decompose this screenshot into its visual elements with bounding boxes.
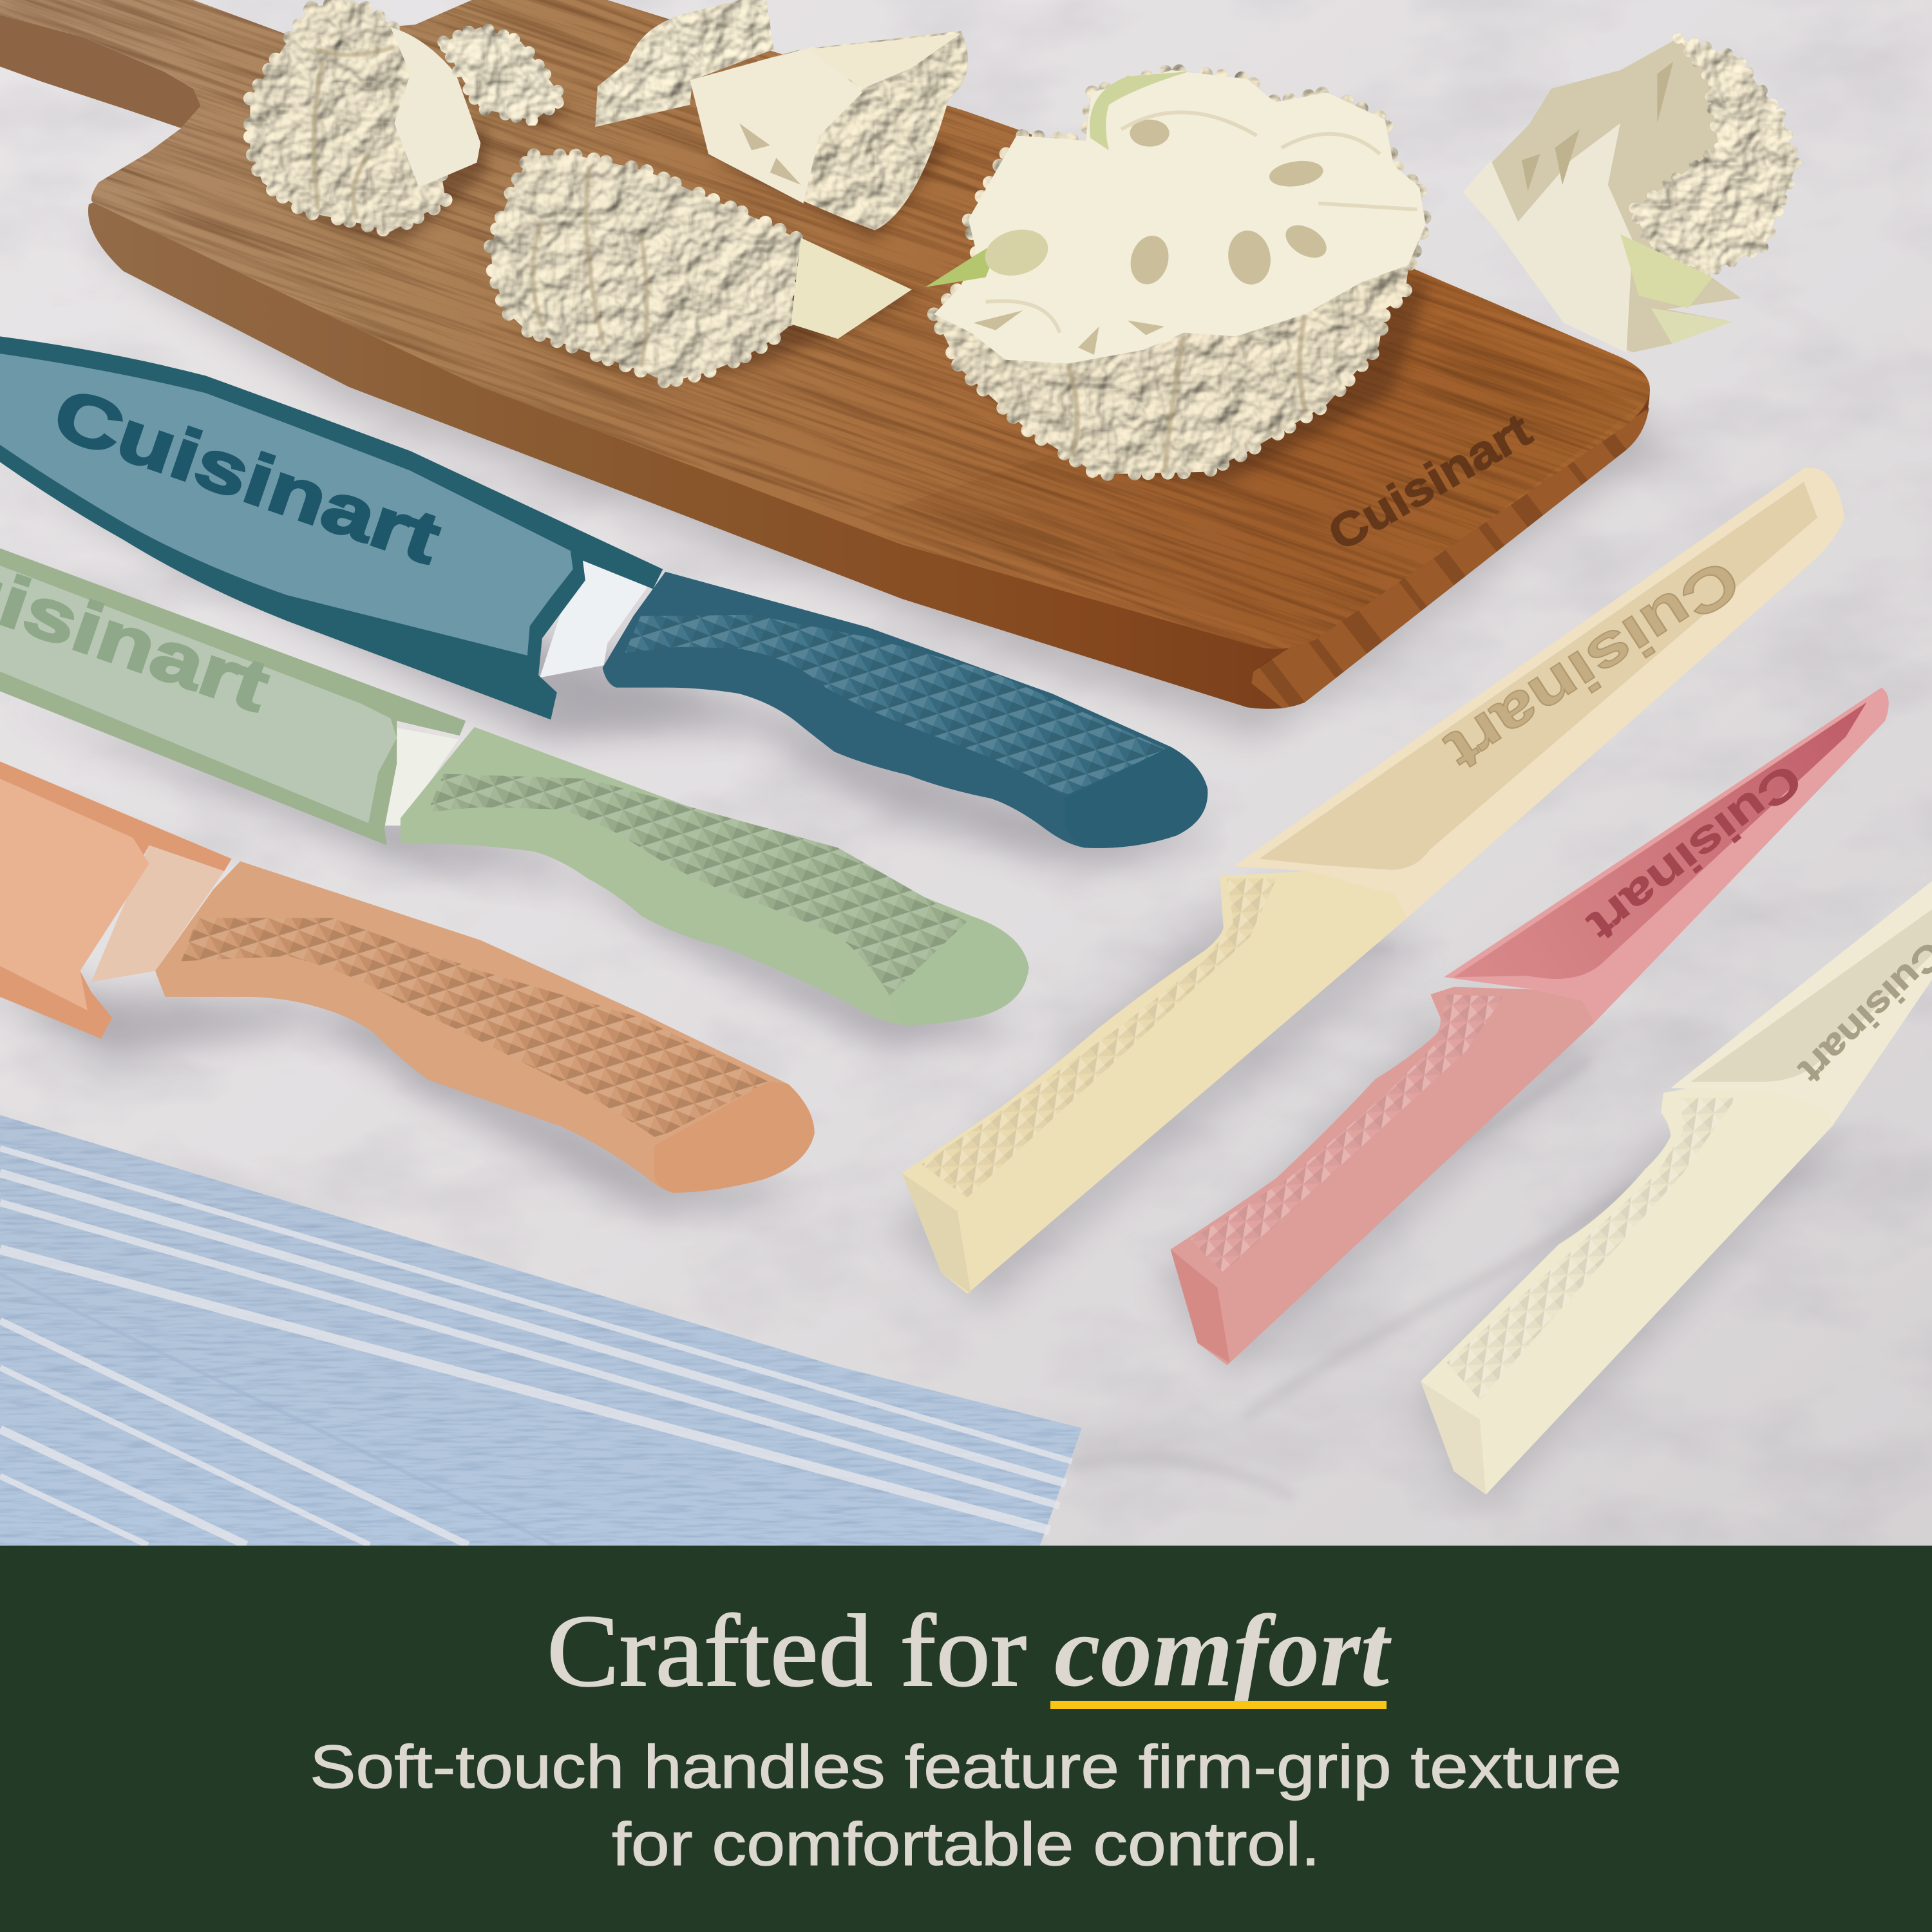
cauliflower floret top left (250, 0, 480, 232)
grip texture (428, 774, 967, 996)
sheath face (1454, 703, 1867, 979)
title: crafted for: Crafted for (547, 1593, 1027, 1708)
handle inner wall (0, 15, 201, 128)
blade (384, 727, 459, 826)
sheath (1671, 881, 1932, 1126)
grip texture (922, 878, 1276, 1198)
board engraved logo: Cuisinart (1320, 404, 1540, 561)
bamboo end grain (1244, 406, 1651, 727)
right knife shadows (887, 912, 1848, 1510)
left knife shadows (0, 475, 1214, 1214)
floret fringe on cut face (986, 112, 1417, 333)
cutting board shadow (74, 234, 1663, 739)
cauliflower piece top middle (595, 0, 774, 127)
small floret (444, 27, 563, 121)
end cap (902, 1173, 971, 1294)
sheath face (0, 565, 397, 823)
outer florets (1633, 38, 1797, 274)
cauliflower stem chunk (690, 31, 968, 231)
blade (540, 557, 653, 677)
cauliflower piece top right (1463, 38, 1797, 352)
orange knife (0, 761, 815, 1193)
board side (88, 123, 1650, 709)
green leaf rim (1090, 71, 1189, 150)
title: comfort: comfort (1054, 1593, 1392, 1708)
yellow underline (1050, 1701, 1387, 1709)
handle (1171, 987, 1595, 1365)
end cap (1421, 1381, 1486, 1495)
board top (0, 0, 1650, 649)
handle (603, 572, 1208, 848)
grip texture (1190, 994, 1503, 1273)
inner cavities (1522, 62, 1673, 191)
handle (155, 861, 815, 1193)
sheath face (0, 354, 573, 656)
handle (902, 871, 1407, 1294)
stem (391, 27, 480, 187)
cut face hollows (973, 120, 1332, 355)
blue chef knife (0, 336, 1208, 848)
green knife (0, 521, 1029, 1025)
cauliflower shadows (265, 99, 1429, 482)
lower seams (1068, 316, 1306, 473)
sheath face (1690, 909, 1932, 1082)
sheath (1233, 468, 1844, 918)
cut face (934, 70, 1426, 363)
wooden cutting board (0, 0, 1650, 709)
end cap (1171, 1249, 1229, 1363)
white stem (1463, 123, 1633, 352)
body text line 1: Soft-touch handles feature firm-grip texture (310, 1733, 1622, 1801)
sheath logo: Cuisinart (44, 373, 450, 579)
sheath rim (0, 336, 663, 719)
pink knife (1171, 688, 1889, 1365)
seams (314, 47, 394, 220)
cauliflower floret middle (490, 155, 912, 382)
green leaves (1620, 234, 1712, 308)
grip texture (1446, 1098, 1736, 1399)
sheath rim (0, 761, 232, 1039)
body text line 2: for comfortable control. (612, 1810, 1320, 1879)
wood grain (0, 0, 1650, 649)
grip texture (625, 615, 1167, 796)
sheath face (0, 779, 149, 1010)
product photo scene (0, 0, 1932, 1546)
sheath face (1259, 482, 1817, 870)
sheath (1444, 688, 1889, 1023)
handle butt (889, 916, 1029, 1025)
handle butt (1065, 746, 1208, 848)
grip texture (181, 918, 769, 1139)
handle (1421, 1088, 1832, 1495)
cream knife (1421, 881, 1932, 1495)
kitchen towel (0, 1115, 1082, 1546)
handle butt (654, 1082, 815, 1193)
sheath logo: Cuisinart (1434, 546, 1751, 784)
caption band (0, 1546, 1932, 1932)
blade (91, 845, 224, 982)
sheath logo: Cuisinart (1578, 754, 1811, 951)
beige knife (902, 468, 1844, 1294)
halved cauliflower (925, 70, 1426, 475)
handle (401, 727, 1029, 1025)
sheath rim (0, 548, 466, 845)
